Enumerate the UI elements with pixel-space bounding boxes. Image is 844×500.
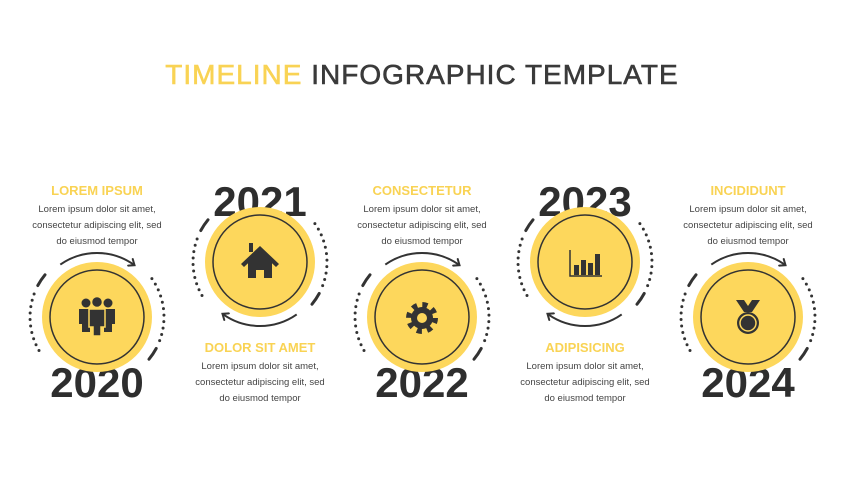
body text: consectetur adipiscing elit, sed bbox=[520, 377, 650, 388]
year 2021: 2021 bbox=[213, 178, 307, 225]
circle 2020 bbox=[30, 262, 164, 372]
body text: do eiusmod tempor bbox=[707, 236, 789, 247]
heading: consectetur: CONSECTETUR bbox=[373, 183, 472, 198]
icon: medal bbox=[736, 300, 760, 334]
year 2024: 2024 bbox=[701, 359, 795, 406]
circle 2021 bbox=[193, 207, 327, 317]
body text: Lorem ipsum dolor sit amet, bbox=[526, 361, 644, 372]
body text: Lorem ipsum dolor sit amet, bbox=[689, 204, 807, 215]
circle 2022 bbox=[355, 262, 489, 372]
step 2021 bbox=[193, 178, 327, 404]
body text: do eiusmod tempor bbox=[56, 236, 138, 247]
icon: team bbox=[79, 296, 115, 336]
heading: lorem ipsum: LOREM IPSUM bbox=[51, 183, 143, 198]
step 2020 bbox=[30, 183, 164, 406]
body text: do eiusmod tempor bbox=[381, 236, 463, 247]
body text: Lorem ipsum dolor sit amet, bbox=[363, 204, 481, 215]
icon: house bbox=[241, 243, 279, 278]
body text: consectetur adipiscing elit, sed bbox=[357, 220, 487, 231]
arrow: top bbox=[711, 253, 785, 265]
year 2023: 2023 bbox=[538, 178, 632, 225]
step 2023 bbox=[518, 178, 652, 404]
year 2022: 2022 bbox=[375, 359, 469, 406]
body text: Lorem ipsum dolor sit amet, bbox=[38, 204, 156, 215]
heading: incididunt: INCIDIDUNT bbox=[710, 183, 786, 198]
arrow: top bbox=[60, 253, 134, 265]
arrow: bottom bbox=[223, 314, 297, 326]
step 2024 bbox=[681, 183, 815, 406]
circle 2024 bbox=[681, 262, 815, 372]
icon: gear bbox=[409, 305, 435, 331]
body text: do eiusmod tempor bbox=[219, 393, 301, 404]
circle 2023 bbox=[518, 207, 652, 317]
year 2020: 2020 bbox=[50, 359, 144, 406]
heading: adipisicing: ADIPISICING bbox=[545, 340, 625, 355]
body text: Lorem ipsum dolor sit amet, bbox=[201, 361, 319, 372]
body text: consectetur adipiscing elit, sed bbox=[195, 377, 325, 388]
body text: consectetur adipiscing elit, sed bbox=[683, 220, 813, 231]
body text: do eiusmod tempor bbox=[544, 393, 626, 404]
title: TIMELINE INFOGRAPHIC TEMPLATE bbox=[165, 59, 679, 90]
icon: bar chart bbox=[570, 250, 602, 276]
arrow: top bbox=[385, 253, 459, 265]
step 2022 bbox=[355, 183, 489, 406]
body text: consectetur adipiscing elit, sed bbox=[32, 220, 162, 231]
heading: dolor sit amet: DOLOR SIT AMET bbox=[205, 340, 315, 355]
arrow: bottom bbox=[548, 314, 622, 326]
